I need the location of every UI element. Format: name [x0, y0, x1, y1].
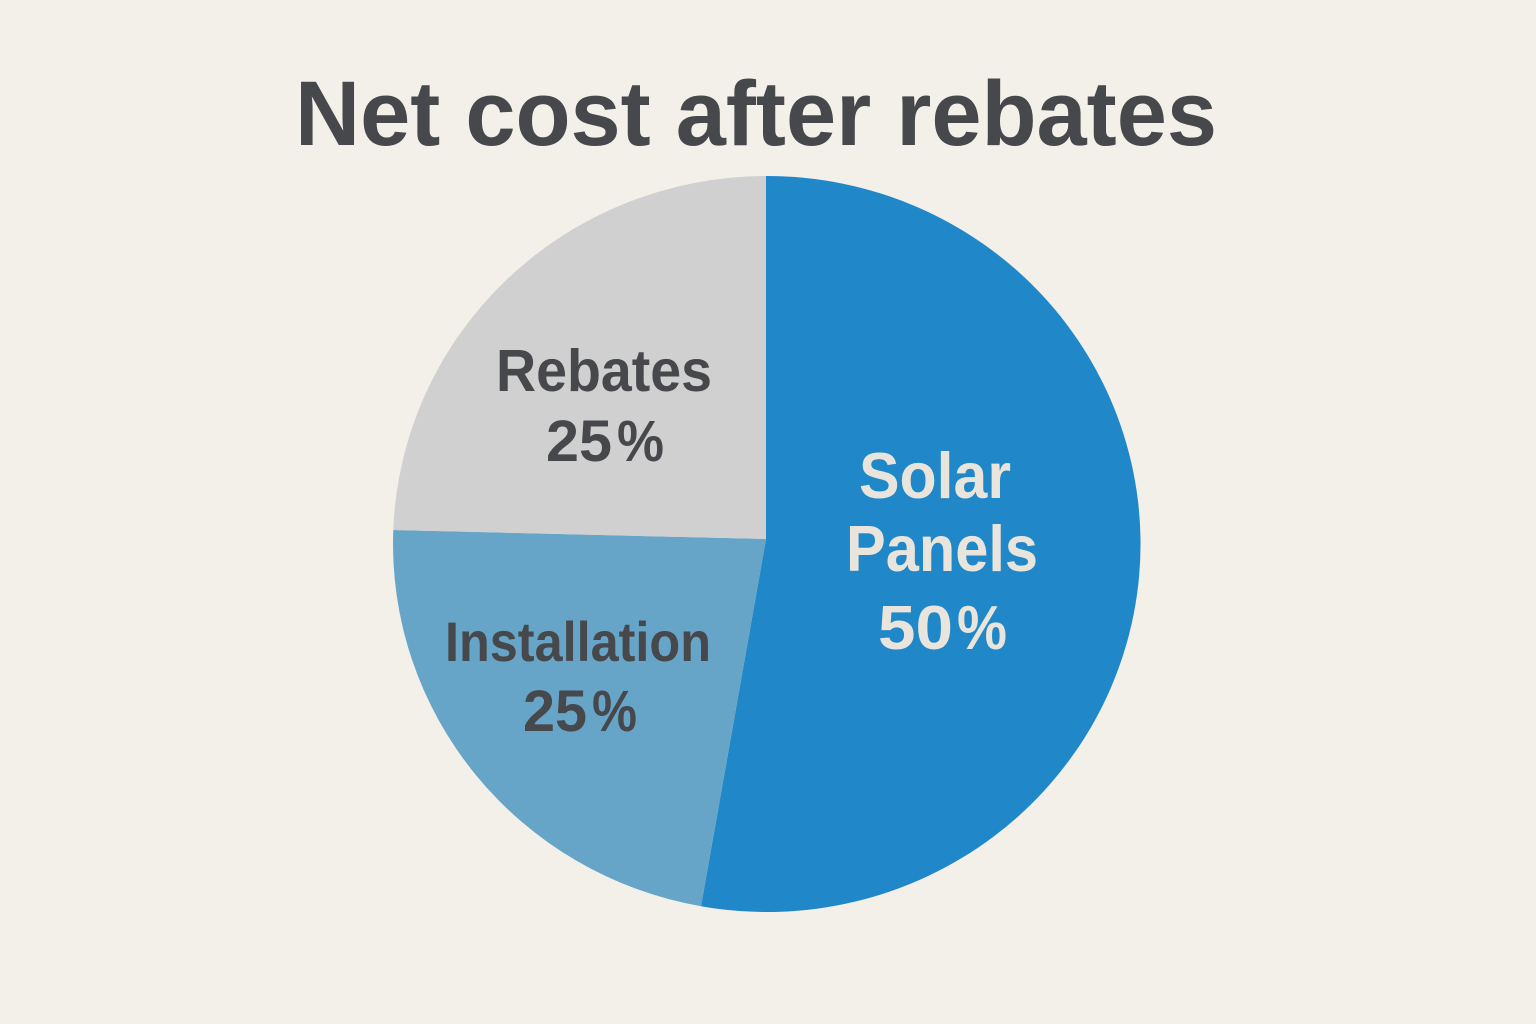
slice: installation	[393, 530, 766, 906]
label: rebates: Rebates	[496, 338, 712, 404]
value: rebates: %	[617, 409, 664, 474]
slice: solar panels	[701, 176, 1141, 912]
slice: rebates	[393, 176, 766, 539]
value: solar panels: 50	[878, 594, 953, 663]
label: installation: Installation	[445, 610, 711, 673]
label: panels: Panels	[846, 512, 1038, 585]
value: installation: %	[592, 679, 637, 744]
pie chart	[393, 176, 1141, 912]
title: Net cost after rebates	[295, 63, 1217, 165]
label: solar: Solar	[859, 439, 1011, 512]
value: solar panels: %	[957, 594, 1007, 663]
value: rebates: 25	[546, 409, 612, 474]
value: installation: 25	[523, 679, 587, 744]
